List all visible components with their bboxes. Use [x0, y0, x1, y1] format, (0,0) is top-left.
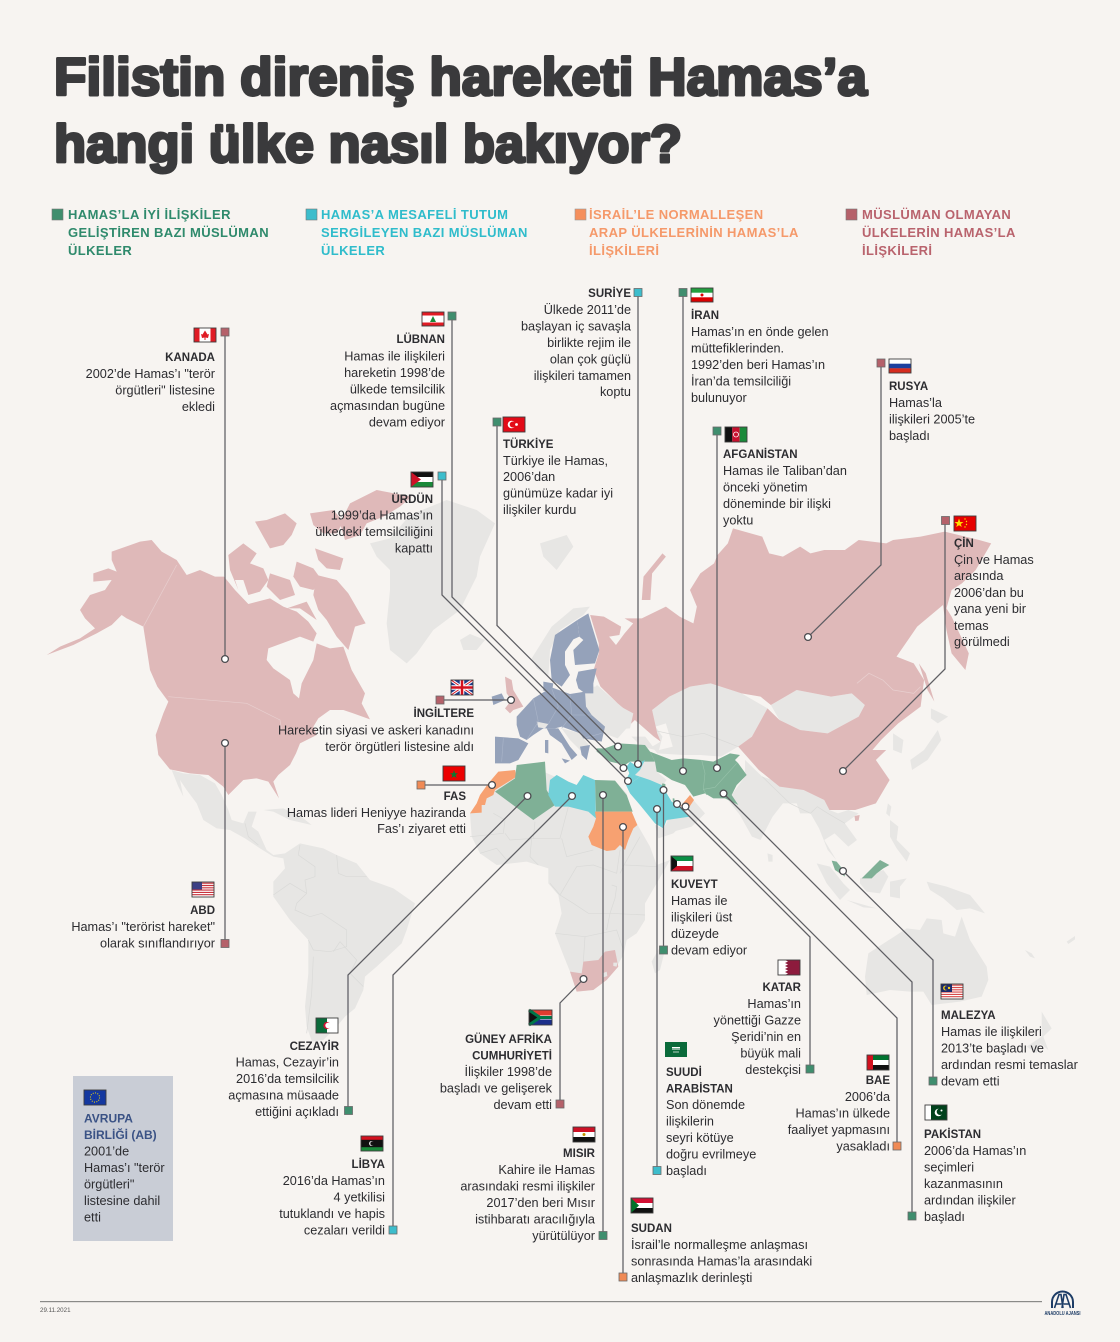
callout: Katar: yönettiği Gazze	[714, 1014, 801, 1028]
callout: Suudi Arabistan: başladı	[666, 1164, 707, 1178]
callout: Afganistan: döneminde bir ilişki	[723, 497, 831, 511]
callout: Cezayir: 2016’da temsilcilik	[236, 1072, 340, 1086]
title: Filistin direniş hareketi Hamas’a	[54, 48, 868, 107]
legend item: distant stance	[306, 207, 528, 258]
flag: ABD	[192, 882, 214, 897]
callout: Katar: Şeridi’nin en	[731, 1030, 801, 1044]
callout: Malezya: MALEZYA	[941, 1010, 996, 1022]
callout: Kuveyt: düzeyde	[671, 927, 719, 941]
panel: Avrupa Birliği: 2001’de	[84, 1144, 129, 1158]
leader: Rusya	[808, 363, 881, 637]
callout: Lübnan: hareketin 1998’de	[344, 366, 445, 380]
callout: Mısır: arasındaki resmi ilişkiler	[460, 1180, 596, 1194]
panel: Avrupa Birliği	[73, 1076, 173, 1241]
legend item: non-muslim countries: ÜLKELERİN HAMAS’LA	[862, 225, 1016, 240]
legend item: good relations: GELİŞTİREN BAZI MÜSLÜMAN	[68, 225, 269, 240]
legend	[52, 207, 1016, 258]
callout: Lübnan: devam ediyor	[369, 416, 446, 430]
callout: BAE: BAE	[866, 1075, 890, 1087]
callout: Çin: yana yeni bir	[954, 602, 1027, 616]
callout: Pakistan: seçimleri	[924, 1160, 974, 1174]
callout: Suriye: başlayan iç savaşla	[521, 320, 632, 334]
leader lines	[225, 292, 945, 1277]
legend item: normalizing arab states: İSRAİL’LE NORMALLEŞEN	[589, 207, 764, 222]
callout: İngiltere: İNGİLTERE	[414, 707, 474, 720]
callout: Libya: 4 yetkilisi	[334, 1190, 385, 1204]
legend item: good relations: HAMAS’LA İYİ İLİŞKİLER	[68, 207, 231, 222]
callout: Suudi Arabistan: SUUDİ	[666, 1066, 702, 1079]
callout: Sudan: anlaşmazlık derinleşti	[631, 1271, 752, 1285]
flag: Suudi Arabistan	[665, 1042, 687, 1057]
callout: Libya: tutuklandı ve hapis	[279, 1207, 385, 1221]
flag: Kanada	[194, 328, 216, 342]
callout: Mısır: istihbaratı aracılığıyla	[475, 1212, 596, 1226]
callout: Çin: temas	[954, 619, 989, 633]
leader: Mısır	[602, 795, 604, 1235]
callout: Afganistan: yoktu	[723, 514, 753, 528]
callout: Kanada: KANADA	[165, 352, 215, 364]
callout: Fas: FAS	[444, 791, 466, 803]
flag: İngiltere	[451, 680, 473, 695]
callout: Rusya: ilişkileri 2005’te	[889, 412, 975, 426]
callout: Kanada: ekledi	[182, 400, 215, 414]
callout: İran: İRAN	[691, 309, 719, 322]
panel: Avrupa Birliği: Hamas’ı "terör	[84, 1161, 165, 1175]
callout: Mısır: Kahire ile Hamas	[498, 1163, 595, 1177]
callout: Lübnan: açmasından bugüne	[330, 399, 445, 413]
callout: Mısır: yürütülüyor	[532, 1229, 596, 1243]
callout: Katar: destekçisi	[745, 1063, 801, 1077]
flag: BAE	[867, 1055, 889, 1070]
leader: İngiltere	[440, 699, 511, 701]
callout: Malezya: ardından resmi temaslar	[941, 1058, 1079, 1072]
callout: Mısır	[460, 1127, 607, 1243]
callout: Suudi Arabistan: ilişkilerin	[666, 1114, 714, 1128]
callout: Lübnan: LÜBNAN	[396, 333, 445, 346]
leader: Fas	[421, 784, 492, 786]
callout: Pakistan: ardından ilişkiler	[924, 1194, 1016, 1208]
callout: Suudi Arabistan: seyri kötüye	[666, 1131, 734, 1145]
flag: Pakistan	[925, 1105, 947, 1120]
callout: Suriye: SURİYE	[588, 287, 631, 300]
callout: Fas	[287, 766, 467, 836]
panel: Avrupa Birliği: AVRUPA	[84, 1112, 133, 1126]
callout: Suriye: Ülkede 2011’de	[544, 303, 631, 317]
leader: Çin	[843, 520, 945, 771]
leader: Malezya	[843, 871, 933, 1081]
legend item: good relations	[52, 207, 269, 258]
callout: Pakistan: kazanmasının	[924, 1177, 1003, 1191]
leader: Afganistan	[716, 431, 718, 768]
callout: Rusya: başladı	[889, 429, 930, 443]
callout: ABD	[71, 882, 229, 950]
callout: Suriye	[521, 287, 642, 399]
flag: Avrupa Birliği	[84, 1090, 106, 1105]
callout: Lübnan	[330, 312, 456, 430]
callout: Çin	[942, 516, 1034, 649]
callout: İran: 1992’den beri Hamas’ın	[691, 358, 825, 372]
callout: Katar: büyük mali	[740, 1046, 801, 1060]
callout: Çin: ÇİN	[954, 537, 974, 550]
callout: Afganistan	[713, 427, 847, 528]
leader: Libya	[393, 796, 572, 1229]
panel: Avrupa Birliği: örgütleri"	[84, 1178, 134, 1192]
callout: Libya: cezaları verildi	[304, 1224, 385, 1238]
leader: Suriye	[637, 292, 639, 764]
callout: Ürdün	[315, 472, 446, 556]
callout: ABD: Hamas’ı "terörist hareket"	[71, 920, 215, 934]
callout: Afganistan: AFGANİSTAN	[723, 448, 798, 461]
callout: BAE	[788, 1055, 901, 1154]
callout: Türkiye: TÜRKİYE	[503, 438, 554, 451]
callout: Malezya: devam etti	[941, 1074, 1000, 1088]
flag: Ürdün	[411, 472, 433, 487]
leader: Lübnan	[452, 316, 624, 768]
leader: Katar	[677, 804, 810, 1069]
callout: Libya: LİBYA	[352, 1158, 385, 1171]
callout: Türkiye: Türkiye ile Hamas,	[503, 454, 608, 468]
callout: Cezayir: ettiğini açıkladı	[255, 1105, 339, 1119]
callout: İran: müttefiklerinden.	[691, 342, 784, 356]
flag: Güney Afrika	[529, 1010, 552, 1025]
flag: Rusya	[889, 359, 911, 373]
flag: Libya	[361, 1136, 383, 1151]
map: africa	[470, 762, 670, 992]
callout: Lübnan: Hamas ile ilişkileri	[344, 350, 445, 364]
callout: Güney Afrika Cumhuriyeti: başladı ve gelişerek	[440, 1082, 553, 1096]
title	[54, 48, 868, 174]
callout: Suudi Arabistan	[653, 1042, 756, 1178]
flag: Afganistan	[725, 427, 747, 442]
callout: İran: bulunuyor	[691, 391, 747, 405]
leader: Suudi Arabistan	[656, 809, 658, 1170]
callout: Afganistan: önceki yönetim	[723, 480, 808, 494]
callout: Ürdün: kapattı	[395, 542, 433, 556]
callout: Kuveyt: Hamas ile	[671, 894, 727, 908]
legend item: distant stance: HAMAS’A MESAFELİ TUTUM	[321, 207, 508, 222]
legend item: distant stance: ÜLKELER	[321, 243, 385, 258]
leader: Kanada	[224, 332, 226, 659]
callout: Kuveyt	[660, 856, 748, 958]
callout: Türkiye: günümüze kadar iyi	[503, 486, 613, 500]
callout: İran: Hamas’ın en önde gelen	[691, 325, 829, 339]
callout: ABD: olarak sınıflandırıyor	[100, 936, 216, 950]
callout: Ürdün: ülkedeki temsilciliğini	[315, 525, 433, 539]
callout: Güney Afrika Cumhuriyeti: CUMHURİYETİ	[472, 1050, 552, 1062]
callout: Çin: görülmedi	[954, 635, 1010, 649]
map: southeast asia and oceania	[817, 820, 1075, 1053]
callout: Suriye: olan çok güçlü	[550, 352, 631, 366]
callout: Sudan: SUDAN	[631, 1223, 672, 1235]
callout: Katar: Hamas’ın	[747, 997, 801, 1011]
callout: Cezayir: CEZAYİR	[290, 1040, 340, 1053]
callout: Kanada: örgütleri" listesine	[115, 384, 215, 398]
flag: Fas	[443, 766, 465, 781]
callout: Fas: Fas’ı ziyaret etti	[377, 822, 466, 836]
callout: Cezayir: Hamas, Cezayir’in	[236, 1056, 339, 1070]
callout: İngiltere	[278, 680, 474, 754]
callout: Suudi Arabistan: Son dönemde	[666, 1098, 745, 1112]
map: middle east	[597, 743, 747, 838]
flag: Malezya	[941, 984, 963, 999]
callout: BAE: yasakladı	[836, 1140, 890, 1154]
callout: Suudi Arabistan: doğru evrilmeye	[666, 1148, 756, 1162]
panel: Avrupa Birliği: BİRLİĞİ (AB)	[84, 1127, 157, 1142]
legend item: non-muslim countries: İLİŞKİLERİ	[862, 243, 932, 258]
callout: İngiltere: Hareketin siyasi ve askeri kanadını	[278, 724, 474, 738]
leader: İran	[682, 292, 684, 771]
callout: Pakistan: PAKİSTAN	[924, 1128, 981, 1141]
flag: Türkiye	[503, 417, 525, 432]
callout: Pakistan	[908, 1105, 1026, 1224]
callout: Pakistan: 2006’da Hamas’ın	[924, 1144, 1026, 1158]
legend item: non-muslim countries: MÜSLÜMAN OLMAYAN	[862, 207, 1011, 222]
callout: Fas: Hamas lideri Heniyye haziranda	[287, 806, 467, 820]
map: europe	[492, 607, 633, 763]
callout: Malezya: 2013’te başladı ve	[941, 1042, 1044, 1056]
map: eurasia	[583, 528, 991, 862]
callout: Suriye: birlikte rejim ile	[547, 336, 631, 350]
flag: Kuveyt	[671, 856, 693, 871]
callout: Türkiye: ilişkiler kurdu	[503, 503, 576, 517]
callout: Sudan: İsrail’le normalleşme anlaşması	[631, 1238, 808, 1252]
leader: Sudan	[622, 827, 624, 1277]
callout: Kanada	[86, 328, 229, 414]
legend item: normalizing arab states	[575, 207, 799, 258]
callout: Mısır: MISIR	[563, 1148, 596, 1160]
callout: Sudan: sonrasında Hamas’la arasındaki	[631, 1254, 812, 1268]
world map	[47, 490, 1075, 1053]
callout: Kuveyt: KUVEYT	[671, 879, 718, 891]
callout: Kuveyt: ilişkileri üst	[671, 910, 733, 924]
callout: Suriye: koptu	[600, 385, 631, 399]
flag: Mısır	[573, 1127, 595, 1142]
callout: Mısır: 2017’den beri Mısır	[486, 1196, 596, 1210]
callout: Türkiye: 2006’dan	[503, 470, 555, 484]
legend item: normalizing arab states: ARAP ÜLKELERİNİN HAMAS’LA	[589, 225, 799, 240]
title: hangi ülke nasıl bakıyor?	[54, 115, 682, 174]
logo: Anadolu Ajansı: ANADOLU AJANSI	[1044, 1311, 1081, 1317]
callout: Katar: KATAR	[762, 982, 802, 994]
callout: Cezayir	[228, 1018, 352, 1119]
leader: Kuveyt	[662, 790, 664, 950]
callout: Çin: arasında	[954, 569, 1004, 583]
callout: Kuveyt: devam ediyor	[671, 944, 748, 958]
legend item: non-muslim countries	[846, 207, 1016, 258]
leader: Pakistan	[724, 794, 912, 1216]
callout: Pakistan: başladı	[924, 1210, 965, 1224]
callout: Kanada: 2002’de Hamas’ı "terör	[86, 367, 216, 381]
callout: İran	[679, 288, 829, 405]
leader: BAE	[686, 806, 897, 1146]
map: north america and arctic	[47, 490, 573, 798]
callout: Sudan	[619, 1198, 812, 1285]
map location dots	[222, 634, 846, 982]
callout: Lübnan: ülkede temsilcilik	[350, 382, 446, 396]
callout: Suudi Arabistan: ARABİSTAN	[666, 1082, 733, 1096]
callout: Güney Afrika Cumhuriyeti	[440, 1010, 564, 1112]
callout: İran: İran’da temsilciliği	[691, 374, 791, 388]
flag: Sudan	[631, 1198, 653, 1213]
callout: Malezya: Hamas ile ilişkileri	[941, 1025, 1042, 1039]
callout: Çin: 2006’dan bu	[954, 586, 1024, 600]
callout: İngiltere: terör örgütleri listesine aldı	[325, 740, 474, 754]
callout: Katar	[714, 960, 814, 1077]
callout: Güney Afrika Cumhuriyeti: devam etti	[493, 1098, 552, 1112]
callout: Rusya: Hamas’la	[889, 396, 943, 410]
panel: Avrupa Birliği: listesine dahil	[84, 1194, 160, 1208]
flag: İran	[691, 288, 713, 302]
callout: Rusya	[877, 359, 975, 443]
flag: Lübnan	[422, 312, 444, 326]
callout: Cezayir: açmasına müsaade	[228, 1088, 339, 1102]
leader: Ürdün	[442, 476, 628, 781]
flag: Cezayir	[316, 1018, 338, 1033]
callout: Güney Afrika Cumhuriyeti: GÜNEY AFRİKA	[465, 1033, 552, 1046]
legend item: normalizing arab states: İLİŞKİLERİ	[589, 243, 659, 258]
callout: Suriye: ilişkileri tamamen	[534, 369, 631, 383]
callout: Rusya: RUSYA	[889, 381, 928, 393]
leader: ABD	[224, 743, 226, 943]
flag: Katar	[778, 960, 800, 975]
callout: Ürdün: ÜRDÜN	[391, 493, 433, 506]
callout: Libya	[279, 1136, 397, 1238]
callout: BAE: faaliyet yapmasını	[788, 1123, 890, 1137]
map: central and south america	[172, 770, 415, 1042]
callout: Çin: Çin ve Hamas	[954, 553, 1034, 567]
callout: BAE: 2006’da	[845, 1090, 891, 1104]
callout: Libya: 2016’da Hamas’ın	[283, 1174, 385, 1188]
callout: Malezya	[929, 984, 1079, 1088]
legend item: good relations: ÜLKELER	[68, 243, 132, 258]
leader: Güney Afrika	[560, 979, 584, 1104]
leader: Cezayir	[348, 796, 528, 1110]
logo: Anadolu Ajansı	[1044, 1292, 1081, 1317]
legend item: distant stance: SERGİLEYEN BAZI MÜSLÜMAN	[321, 225, 528, 240]
callout: Güney Afrika Cumhuriyeti: İlişkiler 1998’de	[465, 1065, 552, 1079]
callout: Afganistan: Hamas ile Taliban’dan	[723, 464, 847, 478]
panel: Avrupa Birliği: etti	[84, 1210, 101, 1224]
callout: BAE: Hamas’ın ülkede	[796, 1106, 890, 1120]
leader: Türkiye	[497, 422, 618, 746]
callout: Türkiye	[493, 417, 613, 517]
callout: Ürdün: 1999’da Hamas’ın	[331, 508, 433, 522]
flag: Çin	[954, 516, 976, 531]
footer line and date: 29.11.2021	[40, 1307, 71, 1314]
callout: ABD: ABD	[190, 905, 215, 917]
